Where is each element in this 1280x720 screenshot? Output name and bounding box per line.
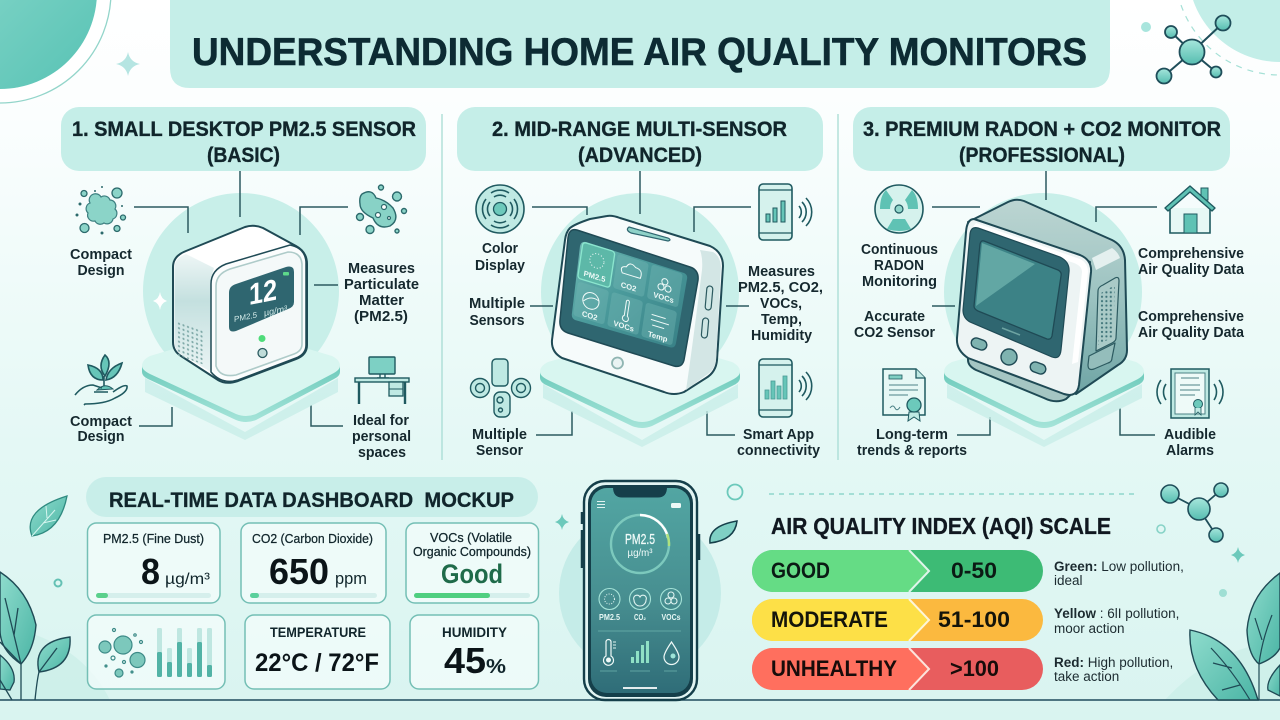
- leader lines 1: [134, 171, 348, 426]
- label: audible alarms: Alarms: [1166, 443, 1214, 459]
- screen unit: µg/m³: [264, 303, 287, 318]
- label: comprehensive data 2: Air Quality Data: [1138, 325, 1245, 341]
- label: multiple sensor: [472, 427, 527, 459]
- label: comprehensive data 1: [1138, 246, 1245, 278]
- screen labels: VOCs: [613, 319, 635, 334]
- screen label PM2.5: PM2.5: [234, 310, 258, 324]
- card: particles chart: [88, 615, 225, 689]
- title banner: [170, 0, 1110, 88]
- label: measures PM: [344, 261, 419, 325]
- label: audible alarms: [1164, 427, 1216, 459]
- title: UNDERSTANDING HOME AIR QUALITY MONITORS: [192, 31, 1087, 74]
- heading 2: (ADVANCED): [578, 144, 702, 167]
- description: red: Red:: [1054, 655, 1084, 670]
- scale row: good: [752, 550, 1043, 592]
- decoration: top-right blob: [1175, 0, 1280, 75]
- decoration: bottom mounds: [0, 625, 1280, 700]
- screen labels: PM2.5: [583, 269, 607, 284]
- label: compact design: Design: [78, 263, 124, 279]
- gauge text: PM2.5: [625, 532, 655, 548]
- description: green: Green:: [1054, 559, 1098, 574]
- screen bezel 3: [963, 228, 1069, 358]
- icon: phone with signal: [759, 184, 812, 240]
- device 1: [153, 226, 307, 383]
- icon: house: [1165, 186, 1215, 233]
- screen icons: [581, 251, 676, 334]
- label: measures PM: Measures: [348, 261, 415, 277]
- label: comprehensive data 2: Comprehensive: [1138, 309, 1244, 325]
- description: red: High pollution,: [1084, 655, 1173, 670]
- decoration: floating leaf left: [30, 496, 67, 536]
- minor lines and home bar: [600, 670, 677, 672]
- label: measures multi: VOCs,: [760, 296, 802, 312]
- icon: molecule lower-right: [1161, 483, 1228, 542]
- body top and side: [968, 200, 1127, 394]
- icon: phone smart app: [759, 359, 812, 417]
- card: temperature: TEMPERATURE: [270, 624, 366, 640]
- screen labels: CO2: [620, 280, 637, 294]
- icon: certificate alarm: [1157, 369, 1223, 418]
- heading 1: (BASIC): [207, 144, 280, 167]
- foot: [968, 352, 1078, 401]
- label: comprehensive data 1: Comprehensive: [1138, 246, 1244, 262]
- card: temperature: 22°C / 72°F: [255, 649, 379, 677]
- label: measures multi: Measures: [748, 264, 815, 280]
- scale row: moderate: [752, 599, 1043, 641]
- card: PM2.5: PM2.5 (Fine Dust): [103, 531, 204, 546]
- label: compact design 2: Compact: [70, 414, 132, 430]
- icon: blob particle: [356, 185, 406, 234]
- icon: report document: [883, 369, 925, 421]
- heading 2: 2. MID-RANGE MULTI-SENSOR: [492, 118, 787, 141]
- screen labels: VOCs: [653, 290, 674, 305]
- scale row: moderate: MODERATE: [771, 607, 888, 632]
- heading 1: [61, 107, 426, 171]
- icon: particles: [76, 186, 126, 234]
- label: measures PM: Matter: [359, 293, 404, 309]
- screen labels: [577, 269, 674, 344]
- scale row: good: 0-50: [951, 558, 997, 583]
- green indicator and button: [258, 272, 289, 358]
- vent 3: [1088, 277, 1119, 370]
- sensor labels: [599, 612, 681, 622]
- card: CO2: 650: [269, 551, 329, 592]
- label: ideal for personal spaces: Ideal for: [353, 413, 409, 429]
- decoration: ring by phone: [728, 484, 742, 500]
- frame top highlight: [972, 223, 1088, 364]
- sensor icons: [599, 588, 682, 610]
- label: audible alarms: Audible: [1164, 427, 1216, 443]
- device 3: [957, 200, 1127, 401]
- card: humidity: HUMIDITY: [442, 624, 508, 640]
- leader lines 3: [932, 171, 1157, 435]
- decoration: sparkle by phone: [555, 514, 569, 530]
- heading 3: 3. PREMIUM RADON + CO2 MONITOR: [863, 118, 1221, 141]
- card: CO2: ppm: [335, 569, 367, 588]
- backdrop circle 3: [944, 193, 1142, 391]
- dashboard heading: [86, 477, 538, 517]
- label: multiple sensor: Sensor: [476, 443, 523, 459]
- label: continuous radon monitoring: Continuous: [861, 242, 938, 258]
- label: compact design: [70, 247, 132, 279]
- label: accurate CO2 sensor: [854, 309, 935, 341]
- phone backdrop: [559, 512, 721, 674]
- platform 2: [540, 337, 740, 447]
- panel: small desktop PM2.5 sensor: [61, 107, 426, 461]
- thermometer, bars and drop: [604, 640, 679, 665]
- label: long-term trends: trends & reports: [857, 443, 967, 459]
- label: measures multi: Humidity: [751, 328, 812, 344]
- vent dots 1: [177, 321, 204, 365]
- card: PM2.5: 8: [141, 551, 160, 592]
- decoration: small accents right: [1157, 525, 1245, 597]
- decoration: dot top-right: [1141, 22, 1151, 32]
- phone mockup: [582, 481, 699, 700]
- label: compact design 2: [70, 414, 132, 445]
- particles: [99, 628, 145, 677]
- label: multiple sensors: Multiple: [469, 296, 525, 312]
- panel: premium radon + CO2 monitor: [853, 107, 1245, 459]
- label: ideal for personal spaces: spaces: [358, 445, 406, 461]
- icon: radiation: [875, 185, 923, 233]
- screen 2: [572, 242, 687, 348]
- card: VOCs: [406, 523, 538, 603]
- gauge text: µg/m³: [628, 547, 653, 559]
- mini bar chart: [157, 628, 212, 677]
- footer line: [0, 699, 1280, 701]
- front frame: [957, 219, 1091, 395]
- backdrop circle 1: [143, 193, 339, 389]
- label: measures multi: [738, 264, 823, 344]
- decoration: sparkle top-left: [116, 52, 140, 76]
- card: VOCs: Organic Compounds): [413, 545, 531, 559]
- gauge text: [625, 532, 655, 559]
- card: PM2.5: µg/m³: [165, 571, 211, 588]
- side highlight: [1092, 248, 1120, 270]
- label: compact design: Compact: [70, 247, 132, 263]
- decoration: leaves bottom-right: [1190, 573, 1280, 700]
- top slot: [627, 227, 670, 241]
- sensor labels: PM2.5: [599, 612, 620, 622]
- description: yellow: Yellow: [1054, 606, 1097, 621]
- card: humidity: %: [486, 656, 506, 678]
- icon: color display sensor: [476, 185, 524, 233]
- label: long-term trends: [857, 427, 967, 459]
- label: multiple sensors: [469, 296, 525, 329]
- card: humidity: [410, 615, 538, 689]
- label: measures PM: Particulate: [344, 277, 419, 293]
- screen labels: CO2: [581, 309, 598, 323]
- description: yellow: : 6lI pollution,: [1096, 606, 1179, 621]
- section: AQI scale: [752, 494, 1184, 690]
- icon: multiple sensors: [470, 359, 530, 417]
- label: smart app connectivity: connectivity: [737, 443, 820, 459]
- heading 3: (PROFESSIONAL): [959, 144, 1125, 167]
- section: dashboard: [86, 477, 538, 689]
- decoration: top-left circle: [0, 0, 111, 103]
- decoration: ring left: [54, 580, 62, 586]
- menu and battery: [597, 502, 681, 508]
- scale row: good: GOOD: [771, 558, 830, 583]
- screen labels: Temp: [647, 329, 668, 344]
- sensor labels: VOCs: [662, 612, 681, 622]
- label: long-term trends: Long-term: [876, 427, 948, 443]
- backdrop circle 2: [541, 193, 739, 391]
- buttons 3: [970, 337, 1047, 375]
- icon: molecule top-right: [1156, 16, 1230, 84]
- label: color display: [475, 241, 525, 274]
- heading 3: [853, 107, 1230, 171]
- side slots: [701, 286, 713, 338]
- scale row: unhealthy: [752, 648, 1043, 690]
- label: multiple sensors: Sensors: [470, 313, 524, 329]
- screen reading 12: 12: [249, 274, 277, 312]
- card: CO2: CO2 (Carbon Dioxide): [252, 531, 373, 546]
- label: color display: Display: [475, 258, 525, 274]
- decoration: leaf by phone: [710, 521, 737, 543]
- decoration: leaves bottom-left: [0, 572, 70, 700]
- bezel 2: [560, 230, 698, 366]
- label: accurate CO2 sensor: CO2 Sensor: [854, 325, 935, 341]
- card: PM2.5: [88, 523, 220, 603]
- label: color display: Color: [482, 241, 518, 257]
- description: green: Low pollution,: [1098, 559, 1184, 574]
- card: temperature: [245, 615, 390, 689]
- platform 1: [142, 330, 340, 440]
- sensor labels: CO₂: [634, 612, 646, 622]
- screen 3: [974, 241, 1061, 339]
- label: continuous radon monitoring: RADON: [874, 258, 924, 274]
- card: CO2: [241, 523, 386, 603]
- label: accurate CO2 sensor: Accurate: [864, 309, 925, 325]
- dashboard heading: REAL-TIME DATA DASHBOARD MOCKUP: [109, 489, 514, 512]
- card: humidity: 45: [444, 640, 486, 681]
- label: comprehensive data 2: [1138, 309, 1245, 341]
- device 2: [552, 216, 723, 394]
- label: comprehensive data 1: Air Quality Data: [1138, 262, 1245, 278]
- scale row: moderate: 51-100: [938, 607, 1010, 632]
- label: measures multi: Temp,: [761, 312, 802, 328]
- gauge ring: [611, 515, 669, 573]
- section dividers: [442, 114, 838, 460]
- label: measures multi: PM2.5, CO2,: [738, 280, 823, 296]
- heading 1: 1. SMALL DESKTOP PM2.5 SENSOR: [72, 118, 416, 141]
- label: ideal for personal spaces: personal: [352, 429, 411, 445]
- dashed rule: [769, 493, 1138, 495]
- icon: plant in hand: [75, 355, 127, 405]
- description: green: ideal: [1054, 573, 1083, 588]
- label: continuous radon monitoring: [861, 242, 938, 290]
- platform 3: [944, 337, 1144, 447]
- description: yellow: moor action: [1054, 621, 1125, 636]
- scale row: unhealthy: UNHEALTHY: [771, 656, 897, 681]
- AQI heading: AIR QUALITY INDEX (AQI) SCALE: [771, 513, 1111, 539]
- scale row: unhealthy: >100: [950, 656, 999, 681]
- label: compact design 2: Design: [78, 429, 124, 445]
- home button: [612, 358, 623, 368]
- label: measures PM: (PM2.5): [354, 309, 408, 325]
- sparkle: [153, 292, 167, 310]
- icon: desk with monitor: [355, 357, 409, 404]
- card: VOCs: Good: [441, 559, 503, 589]
- panel: mid-range multi-sensor: [457, 107, 823, 459]
- description: red: take action: [1054, 669, 1119, 684]
- screen 1: [229, 267, 294, 332]
- leader lines 2: [530, 171, 751, 435]
- heading 2: [457, 107, 823, 171]
- label: ideal for personal spaces: [352, 413, 411, 461]
- card: VOCs: VOCs (Volatile: [430, 531, 512, 545]
- label: continuous radon monitoring: Monitoring: [862, 274, 937, 290]
- label: multiple sensor: Multiple: [472, 427, 527, 443]
- label: smart app connectivity: [737, 427, 820, 459]
- divider: [598, 630, 681, 632]
- label: smart app connectivity: Smart App: [743, 427, 814, 443]
